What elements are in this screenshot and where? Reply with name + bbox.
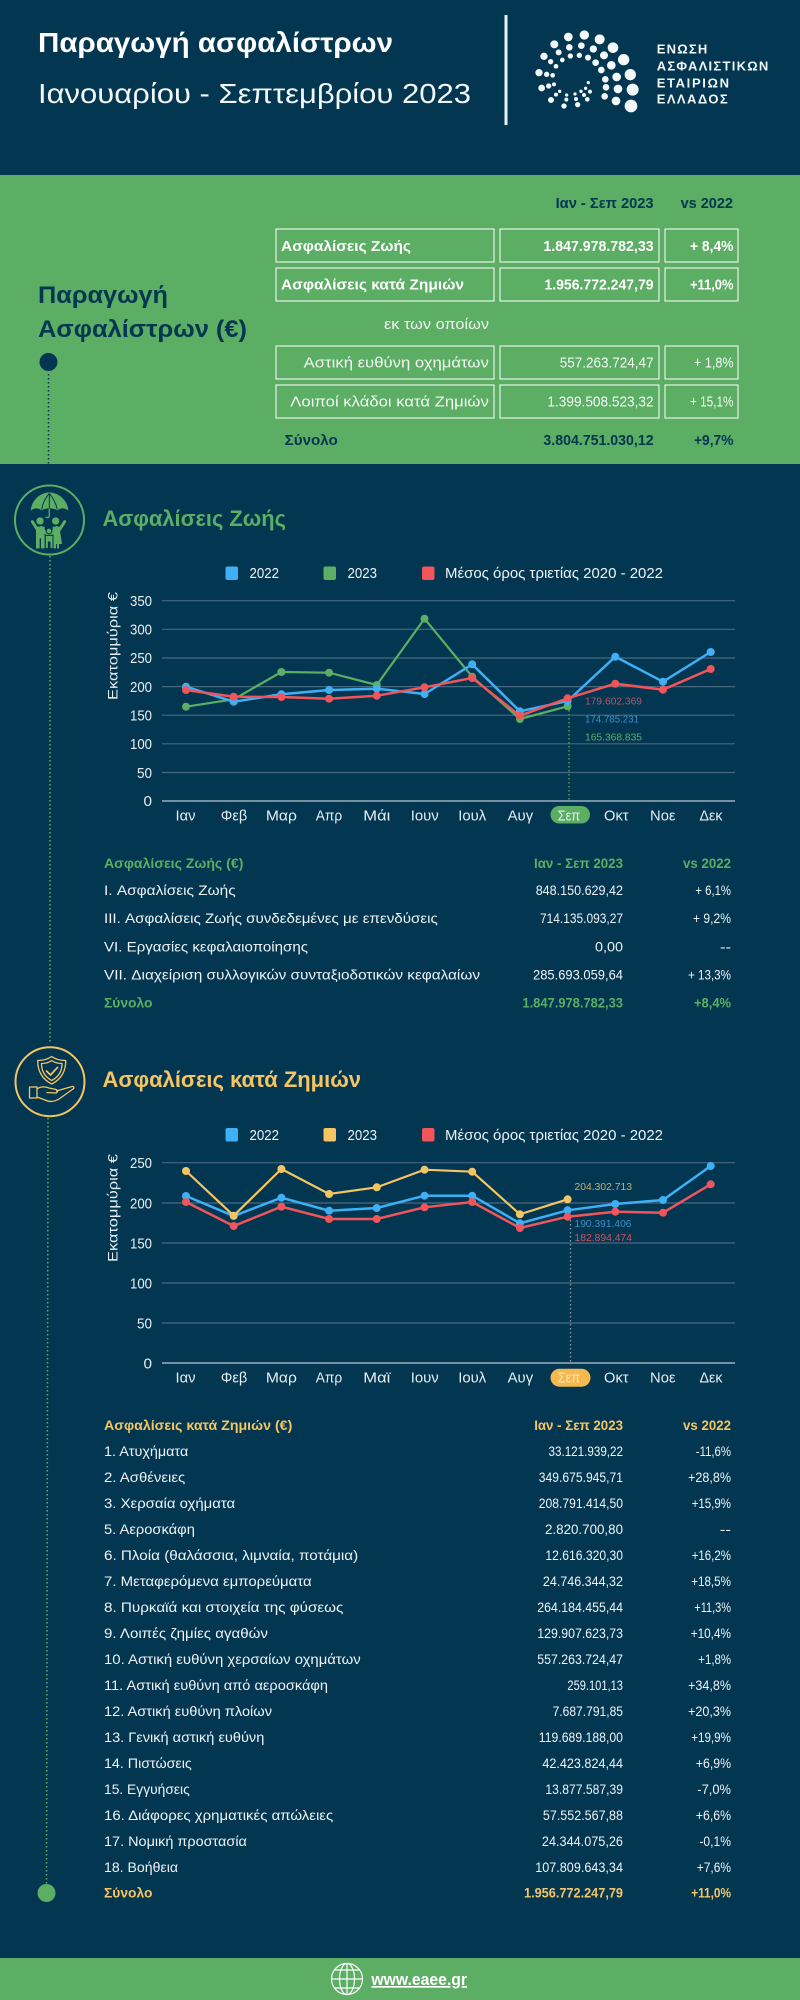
rows: +1,8% — [698, 1652, 731, 1667]
x axis labels: Δεκ — [700, 808, 723, 824]
rows: VII. Διαχείριση συλλογικών συνταξιοδοτικών κεφαλαίων — [104, 968, 480, 982]
website link: www.eaee.gr — [370, 1970, 467, 1989]
total row — [104, 996, 731, 1010]
heading: non-life insurance: Ασφαλίσεις κατά Ζημιών — [102, 1067, 361, 1092]
heading: production of premiums — [38, 282, 247, 343]
x axis labels: Ιουλ — [458, 1370, 487, 1386]
total row: Σύνολο — [104, 1886, 152, 1900]
y axis labels: 150 — [130, 1236, 152, 1252]
rows: 7. Μεταφερόμενα εμπορεύματα — [104, 1574, 312, 1589]
rows: 129.907.623,73 — [537, 1626, 623, 1641]
rows: 16. Διάφορες χρηματικές απώλειες — [104, 1808, 334, 1823]
rows: 5. Αεροσκάφη — [104, 1522, 195, 1537]
total row: 1.847.978.782,33 — [522, 996, 623, 1010]
row: motor liability: + 1,8% — [694, 354, 734, 372]
timeline end dot — [38, 1884, 56, 1902]
total row: Σύνολο — [104, 996, 152, 1010]
rows: 208.791.414,50 — [539, 1496, 623, 1511]
rows: +20,3% — [688, 1704, 731, 1719]
y axis labels: 200 — [130, 1196, 152, 1212]
rows: +28,8% — [688, 1470, 731, 1485]
chart legend: 2023 — [348, 1127, 377, 1144]
rows: 848.150.629,42 — [536, 883, 623, 898]
row: other non-life: Λοιποί κλάδοι κατά Ζημιών — [290, 394, 489, 410]
panel: premium production summary — [0, 175, 800, 464]
rows: 264.184.455,44 — [537, 1600, 623, 1615]
September value annotations: 182.894.474 — [574, 1232, 632, 1244]
x axis labels: Οκτ — [604, 808, 629, 824]
rows: +15,9% — [692, 1496, 731, 1511]
chart legend: 2022 — [250, 565, 279, 582]
rows: +16,2% — [692, 1548, 731, 1563]
rows: -7,0% — [697, 1782, 731, 1797]
subtitle: Ιανουαρίου - Σεπτεμβρίου 2023 — [38, 78, 471, 109]
rows: 12.616.320,30 — [545, 1548, 623, 1563]
rows: 8. Πυρκαϊά και στοιχεία της φύσεως — [104, 1600, 344, 1615]
chart legend: 2022 — [250, 1127, 279, 1144]
rows: 3. Χερσαία οχήματα — [104, 1496, 235, 1511]
x axis labels: Μάι — [363, 808, 390, 824]
logo text: ΕΛΛΑΔΟΣ — [657, 92, 728, 106]
total row: 1.956.772.247,79 — [524, 1886, 623, 1900]
icon: globe — [332, 1964, 362, 1994]
row: non-life insurance: 1.956.772.247,79 — [544, 276, 654, 294]
rows: 33.121.939,22 — [548, 1444, 623, 1459]
rows: 9. Λοιπές ζημίες αγαθών — [104, 1626, 268, 1641]
x axis labels: Ιαν — [176, 1370, 196, 1386]
rows: -- — [720, 940, 731, 954]
logo text: ΕΝΩΣΗ — [657, 42, 707, 56]
chart legend — [226, 1127, 663, 1144]
September highlight — [550, 1369, 590, 1387]
rows: 285.693.059,64 — [533, 968, 623, 982]
y axis labels: 50 — [137, 1316, 152, 1332]
y axis labels: 0 — [144, 793, 152, 810]
rows: 6. Πλοία (θαλάσσια, λιμναία, ποτάμια) — [104, 1548, 358, 1563]
rows: 557.263.724,47 — [537, 1652, 623, 1667]
logo: dotted arc mark — [536, 31, 638, 112]
x axis labels: Αυγ — [508, 808, 534, 824]
table header: Ιαν - Σεπ 2023 — [534, 1418, 623, 1433]
chart: life insurance monthly premiums — [104, 565, 735, 824]
rows: 13. Γενική αστική ευθύνη — [104, 1730, 264, 1745]
x axis labels: Σεπ — [558, 808, 580, 824]
y axis labels: 150 — [130, 708, 152, 724]
rows: 12. Αστική ευθύνη πλοίων — [104, 1704, 272, 1719]
row: non-life insurance — [276, 268, 738, 301]
row: life insurance: + 8,4% — [690, 238, 734, 255]
rows: 11. Αστική ευθύνη από αεροσκάφη — [104, 1678, 328, 1693]
x axis labels: Σεπ — [558, 1370, 580, 1386]
rows: 259.101,13 — [567, 1678, 623, 1693]
rows: -0,1% — [699, 1834, 731, 1849]
rows: 10. Αστική ευθύνη χερσαίων οχημάτων — [104, 1652, 361, 1667]
rows: 7.687.791,85 — [553, 1704, 623, 1719]
rows: -- — [720, 1522, 731, 1537]
y axis labels: 300 — [130, 622, 152, 638]
table: life insurance breakdown — [104, 856, 731, 1010]
rows: 1. Ατυχήματα — [104, 1444, 189, 1459]
row: non-life insurance: Ασφαλίσεις κατά Ζημιών — [281, 276, 464, 294]
line: 2022 — [182, 648, 715, 715]
rows: 2.820.700,80 — [545, 1522, 623, 1537]
y axis labels: 200 — [130, 679, 152, 696]
timeline connector: life to non-life — [49, 556, 51, 1042]
heading: production of premiums: Ασφαλίστρων (€) — [38, 316, 247, 343]
row: life insurance — [276, 229, 738, 262]
row: non-life insurance: +11,0% — [690, 276, 734, 294]
rows: 2. Ασθένειες — [104, 1470, 186, 1485]
y axis title: Εκατομμύρια € — [104, 1154, 120, 1262]
total row: +11,0% — [691, 1886, 731, 1900]
header panel — [38, 15, 768, 125]
row: total: 3.804.751.030,12 — [543, 432, 654, 449]
x axis labels — [176, 808, 723, 824]
row: other non-life: 1.399.508.523,32 — [547, 394, 654, 410]
rows: + 13,3% — [688, 968, 731, 982]
y axis labels: 0 — [144, 1356, 152, 1372]
footer band — [0, 1958, 800, 2000]
x axis labels — [176, 1370, 723, 1386]
row: total: Σύνολο — [285, 432, 338, 449]
September value annotations: 165.368.835 — [585, 732, 642, 744]
x axis labels: Απρ — [316, 1370, 342, 1386]
September value annotations: 204.302.713 — [574, 1181, 632, 1193]
rows: 18. Βοήθεια — [104, 1860, 178, 1875]
table header: Ασφαλίσεις κατά Ζημιών (€) — [104, 1418, 292, 1433]
x axis labels: Ιουν — [411, 1370, 439, 1386]
rows: I. Ασφαλίσεις Ζωής — [104, 883, 236, 898]
chart legend: 2023 — [348, 565, 377, 582]
chart legend: Μέσος όρος τριετίας 2020 - 2022 — [445, 1127, 663, 1144]
y axis labels: 100 — [130, 736, 152, 753]
September value annotations: 190.391.406 — [574, 1218, 632, 1230]
timeline start dot — [40, 353, 58, 371]
heading: life insurance: Ασφαλίσεις Ζωής — [102, 506, 286, 531]
rows: 57.552.567,88 — [543, 1808, 623, 1823]
rows: 17. Νομική προστασία — [104, 1834, 247, 1849]
rows: 107.809.643,34 — [535, 1860, 623, 1875]
rows: +6,6% — [696, 1808, 731, 1823]
total row — [104, 1886, 731, 1900]
table header: vs 2022 — [683, 856, 731, 871]
y axis labels — [130, 593, 152, 810]
September value annotations — [585, 696, 642, 744]
rows: +7,6% — [697, 1860, 731, 1875]
rows: 119.689.188,00 — [539, 1730, 623, 1745]
rows: + 6,1% — [695, 883, 731, 898]
rows: 24.344.075,26 — [542, 1834, 623, 1849]
rows: +18,5% — [691, 1574, 731, 1589]
row: motor liability: Αστική ευθύνη οχημάτων — [304, 354, 489, 372]
chart legend: Μέσος όρος τριετίας 2020 - 2022 — [445, 565, 663, 582]
x axis labels: Δεκ — [700, 1370, 723, 1386]
x axis labels: Φεβ — [221, 1370, 248, 1386]
icon: shield over hand — [16, 1047, 84, 1116]
rows: 349.675.945,71 — [539, 1470, 623, 1485]
icon: umbrella over family — [15, 486, 84, 554]
rows: 714.135.093,27 — [540, 911, 623, 926]
title: Παραγωγή ασφαλίστρων — [38, 27, 393, 58]
chart: non-life insurance monthly premiums — [104, 1127, 735, 1387]
total row: +8,4% — [694, 996, 731, 1010]
x axis labels: Μαρ — [266, 1370, 297, 1386]
x axis labels: Ιουλ — [458, 808, 487, 824]
row: life insurance: Ασφαλίσεις Ζωής — [281, 238, 411, 255]
row: total — [285, 432, 734, 449]
row: life insurance: 1.847.978.782,33 — [543, 238, 654, 255]
September value annotations — [574, 1181, 632, 1244]
rows: 14. Πιστώσεις — [104, 1756, 192, 1771]
table header: Ιαν - Σεπ 2023 — [534, 856, 623, 871]
x axis labels: Οκτ — [604, 1370, 629, 1386]
September highlight — [550, 806, 590, 824]
x axis labels: Φεβ — [221, 808, 248, 824]
rows: 42.423.824,44 — [542, 1756, 623, 1771]
rows: 0,00 — [595, 940, 623, 954]
line: 2023 — [182, 615, 572, 723]
chart legend — [226, 565, 663, 582]
line: 2022 — [182, 1162, 715, 1227]
timeline connector: non-life to end — [46, 1118, 48, 1884]
rows: +19,9% — [691, 1730, 731, 1745]
rows — [104, 1444, 731, 1875]
rows: III. Ασφαλίσεις Ζωής συνδεδεμένες με επενδύσεις — [104, 911, 438, 926]
rows: 13.877.587,39 — [545, 1782, 623, 1797]
row: other non-life — [276, 385, 738, 418]
y axis labels: 100 — [130, 1276, 152, 1292]
x axis labels: Νοε — [650, 1370, 676, 1386]
row: motor liability: 557.263.724,47 — [560, 354, 654, 372]
rows: +11,3% — [694, 1600, 731, 1615]
x axis labels: Μαϊ — [363, 1370, 391, 1386]
y axis labels — [130, 1155, 152, 1372]
table header: vs 2022 — [683, 1418, 731, 1433]
rows: +6,9% — [696, 1756, 731, 1771]
line: three-year average — [182, 665, 715, 720]
table header — [104, 856, 731, 871]
label: of which: εκ των οποίων — [384, 316, 489, 333]
table column headers: vs 2022 — [681, 195, 733, 212]
September value annotations: 174.785.231 — [585, 714, 639, 726]
rows: +10,4% — [691, 1626, 731, 1641]
rows: 24.746.344,32 — [543, 1574, 623, 1589]
table column headers — [556, 195, 733, 212]
x axis labels: Αυγ — [508, 1370, 534, 1386]
table header: Ασφαλίσεις Ζωής (€) — [104, 856, 243, 871]
rows: -11,6% — [696, 1444, 731, 1459]
x axis labels: Νοε — [650, 808, 676, 824]
x axis labels: Ιουν — [411, 808, 439, 824]
y axis labels: 250 — [130, 1155, 152, 1172]
logo text: ΕΤΑΙΡΙΩΝ — [657, 76, 729, 90]
line: 2023 — [182, 1165, 572, 1220]
x axis labels: Μαρ — [266, 808, 297, 824]
line: three-year average — [182, 1180, 715, 1232]
row: other non-life: + 15,1% — [690, 394, 734, 410]
heading: production of premiums: Παραγωγή — [38, 282, 168, 309]
rows: VI. Εργασίες κεφαλαιοποίησης — [104, 940, 309, 954]
x axis labels: Ιαν — [176, 808, 196, 824]
table header — [104, 1418, 731, 1433]
y axis title: Εκατομμύρια € — [104, 592, 120, 700]
row: motor liability — [276, 346, 738, 379]
y axis labels: 50 — [137, 765, 152, 782]
rows — [104, 883, 731, 982]
September value annotations: 179.602.369 — [585, 696, 642, 708]
rows: + 9,2% — [693, 911, 731, 926]
logo text — [657, 42, 768, 106]
rows: +34,8% — [688, 1678, 731, 1693]
table column headers: Ιαν - Σεπ 2023 — [556, 195, 654, 212]
rows: 15. Εγγυήσεις — [104, 1782, 190, 1797]
x axis labels: Απρ — [316, 808, 342, 824]
y axis labels: 350 — [130, 593, 152, 610]
logo text: ΑΣΦΑΛΙΣΤΙΚΩΝ — [657, 58, 768, 74]
table: non-life insurance breakdown — [104, 1418, 731, 1900]
row: total: +9,7% — [694, 432, 734, 449]
y axis labels: 250 — [130, 650, 152, 667]
